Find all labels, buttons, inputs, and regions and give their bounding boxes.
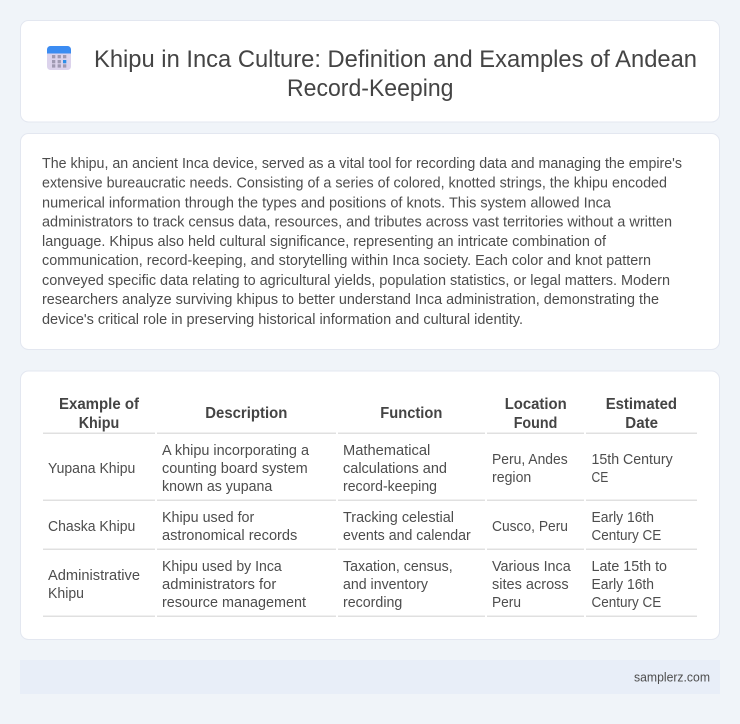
title xyxy=(94,46,697,102)
table row: Administrative Khipu: Peru xyxy=(492,595,521,611)
table row: Administrative Khipu: Early 16th xyxy=(592,577,654,593)
table row: Yupana Khipu: CE xyxy=(592,470,609,486)
table header row: Khipu xyxy=(79,415,119,432)
text block: khipu description: communication, record-keeping, and storytelling within Inca society. Each color and knot pattern xyxy=(42,253,651,269)
table header row: Function xyxy=(380,405,442,422)
text block: khipu description: The khipu, an ancient Inca device, served as a vital tool for recording data and managing the empire's xyxy=(42,156,682,172)
table row: Administrative Khipu: Century CE xyxy=(592,595,662,611)
panel: title header xyxy=(20,20,720,122)
table row: Chaska Khipu: Chaska Khipu xyxy=(48,519,135,535)
table row: Yupana Khipu: calculations and xyxy=(343,461,447,477)
table row: Chaska Khipu xyxy=(43,510,697,550)
panel: examples table xyxy=(20,371,720,640)
table row: Yupana Khipu: Yupana Khipu xyxy=(48,461,135,477)
table header row: Estimated xyxy=(606,396,677,413)
table row: Administrative Khipu: Late 15th to xyxy=(592,559,667,575)
text block: khipu description xyxy=(42,156,682,328)
table row: Yupana Khipu xyxy=(43,443,697,501)
text block: khipu description: language. Khipus also held cultural significance, representing an intricate combination of xyxy=(42,234,607,250)
table row: Chaska Khipu: Early 16th xyxy=(592,510,654,526)
table row: Administrative Khipu: Taxation, census, xyxy=(343,559,453,575)
table row: Chaska Khipu: Century CE xyxy=(592,528,662,544)
table header row xyxy=(43,396,697,434)
table row: Administrative Khipu xyxy=(43,559,697,617)
table row: Administrative Khipu: administrators for xyxy=(162,577,276,593)
text block: khipu description: numerical information through the types and positions of knots. This system allowed Inca xyxy=(42,196,612,212)
table row: Administrative Khipu: Khipu used by Inca xyxy=(162,559,283,575)
table row: Yupana Khipu: known as yupana xyxy=(162,479,273,495)
footer xyxy=(20,660,720,694)
text block: khipu description: device's critical role in preserving historical information and cultural identity. xyxy=(42,312,523,328)
table row: Chaska Khipu: Khipu used for xyxy=(162,510,254,526)
table row: Administrative Khipu: Various Inca xyxy=(492,559,572,575)
table header row: Description xyxy=(205,405,287,422)
table row: Administrative Khipu: and inventory xyxy=(343,577,429,593)
table row: Chaska Khipu: astronomical records xyxy=(162,528,297,544)
panel: introduction xyxy=(20,134,720,350)
table row: Administrative Khipu: Khipu xyxy=(48,586,84,602)
table row: Chaska Khipu: events and calendar xyxy=(343,528,471,544)
text block: khipu description: extensive bureaucratic needs. Consisting of a series of colored, knotted strings, the khipu encoded xyxy=(42,176,667,192)
table row: Chaska Khipu: Tracking celestial xyxy=(343,510,454,526)
table header row: Found xyxy=(514,415,557,432)
table row: Yupana Khipu: Peru, Andes xyxy=(492,452,568,468)
table row: Administrative Khipu: recording xyxy=(343,595,402,611)
table row: Yupana Khipu: A khipu incorporating a xyxy=(162,443,310,459)
icon: calendar xyxy=(47,46,71,70)
title: Record-Keeping xyxy=(287,75,454,102)
footer: samplerz.com xyxy=(634,670,710,684)
text block: khipu description: administrators to track census data, resources, and tributes across vast territories without a written xyxy=(42,214,672,230)
table row: Chaska Khipu: Cusco, Peru xyxy=(492,519,568,535)
text block: khipu description: researchers analyze surviving khipus to better understand Inca administration, demonstrating the xyxy=(42,292,659,308)
table row: Administrative Khipu: resource management xyxy=(162,595,306,611)
table row: Yupana Khipu: region xyxy=(492,470,531,486)
table row: Administrative Khipu: sites across xyxy=(492,577,569,593)
table row: Yupana Khipu: 15th Century xyxy=(592,452,673,468)
table row: Yupana Khipu: counting board system xyxy=(162,461,308,477)
table row: Yupana Khipu: Mathematical xyxy=(343,443,430,459)
table header row: Location xyxy=(505,396,567,413)
text block: khipu description: conveyed specific data relating to agricultural yields, population statistics, or legal matters. Modern xyxy=(42,273,670,289)
table header row: Example of xyxy=(59,396,140,413)
table row: Administrative Khipu: Administrative xyxy=(48,568,140,584)
table row: Yupana Khipu: record-keeping xyxy=(343,479,437,495)
title: Khipu in Inca Culture: Definition and Examples of Andean xyxy=(94,46,697,73)
table header row: Date xyxy=(625,415,658,432)
